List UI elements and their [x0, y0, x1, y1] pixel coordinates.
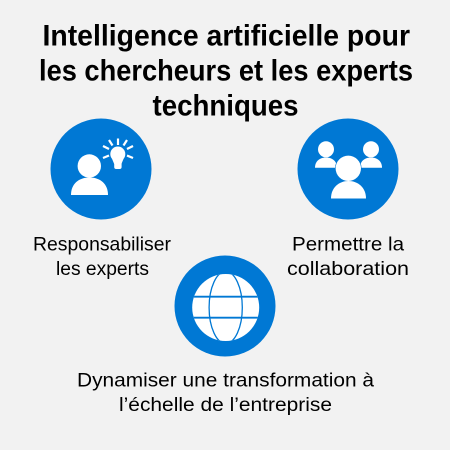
label: Responsabiliser les experts: les experts [56, 258, 149, 280]
label: Permettre la collaboration: Permettre la [292, 234, 404, 256]
title [39, 20, 413, 122]
title: les chercheurs et les experts [39, 54, 413, 88]
label: Permettre la collaboration [287, 234, 409, 280]
label: Permettre la collaboration: collaboration [287, 258, 409, 280]
title: techniques [152, 90, 298, 122]
label: Dynamiser une transformation à l'échelle de l'entreprise [77, 370, 374, 416]
label: Dynamiser une transformation à l'échelle de l'entreprise: l’échelle de l’entreprise [119, 394, 332, 416]
label: Responsabiliser les experts [33, 234, 171, 280]
title: Intelligence artificielle pour [42, 20, 410, 52]
label: Dynamiser une transformation à l'échelle de l'entreprise: Dynamiser une transformation à [77, 370, 374, 392]
icon: globe [174, 256, 276, 356]
label: Responsabiliser les experts: Responsabiliser [33, 234, 171, 256]
icon: collaboration group [298, 118, 398, 220]
icon: expert with light bulb [50, 118, 152, 220]
